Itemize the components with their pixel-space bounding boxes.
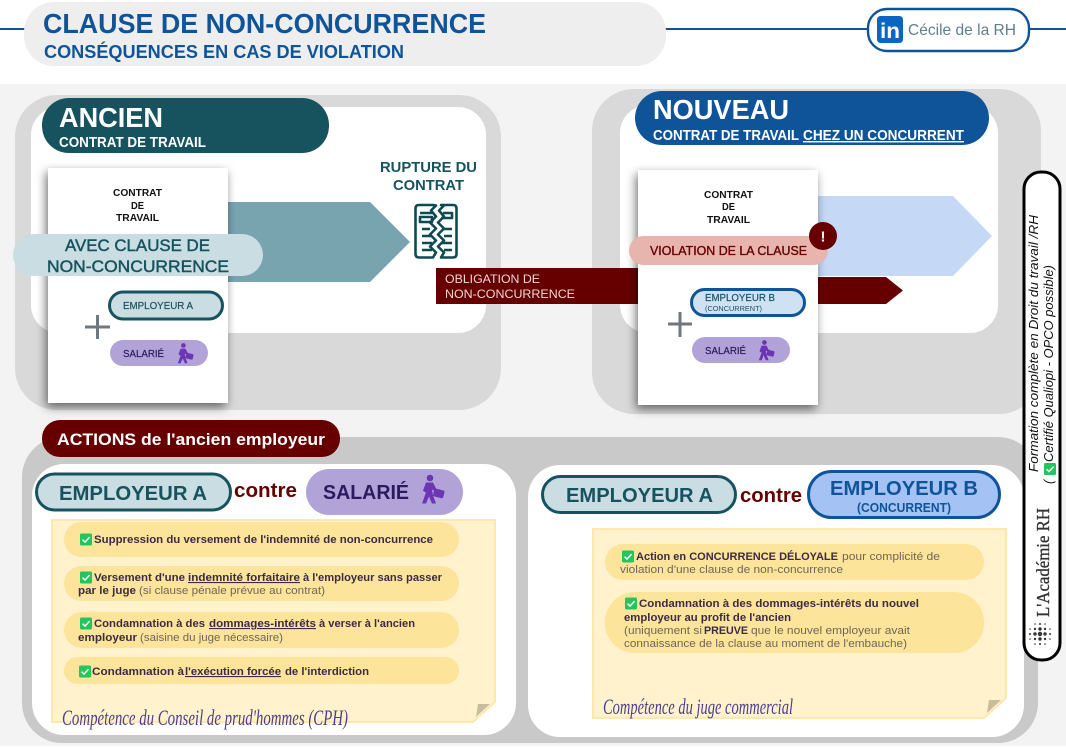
badge: employeur a: EMPLOYEUR A [59, 483, 207, 505]
item: indemnite forfaitaire: par le juge [78, 585, 136, 597]
icon: check [1044, 463, 1056, 475]
sidebar: formation [1024, 172, 1060, 660]
linkedin badge: in [880, 20, 900, 43]
item: concurrence deloyale [605, 544, 984, 580]
sidebar: formation: L'Académie RH [1033, 508, 1053, 617]
badge: salarie: SALARIÉ [123, 347, 164, 360]
sidebar: formation: ( [1042, 478, 1056, 484]
badge: employeur a: EMPLOYEUR A [566, 485, 713, 507]
heading: nouveau: NOUVEAU [653, 94, 789, 125]
item: dommages-interets: dommages-intérêts [209, 618, 316, 630]
sidebar: formation: Certifié Qualiopi - OPCO possible) [1042, 265, 1056, 462]
heading: ancien: CONTRAT DE TRAVAIL [59, 135, 206, 151]
item: dommages-interets: (saisine du juge nécessaire) [140, 632, 283, 644]
item: dommages-interets: Condamnation à des [94, 618, 205, 630]
item: suppression [64, 522, 459, 557]
badge: salarie [306, 469, 463, 515]
badge: employeur b: (CONCURRENT) [857, 501, 951, 515]
heading: nouveau: CHEZ UN CONCURRENT [803, 128, 964, 144]
card: contrat de travail [638, 170, 818, 405]
label: violation de la clause [629, 236, 828, 265]
arrow: obligation de non-concurrence: OBLIGATION DE [445, 272, 540, 286]
badge: employeur b: EMPLOYEUR B [830, 478, 978, 500]
rupture label: CONTRAT [393, 177, 464, 194]
item: dommages-interets: employeur au profit de l'ancien [624, 612, 791, 624]
badge: salarie: SALARIÉ [705, 344, 746, 357]
subpanel: employeur a contre employeur b [528, 465, 1024, 737]
title block [24, 2, 666, 66]
contre: contre [234, 480, 297, 502]
item: indemnite forfaitaire: à l'employeur sans passer [303, 572, 443, 584]
badge: employeur b [692, 290, 804, 316]
badge: salarie: SALARIÉ [323, 481, 409, 504]
label: avec clause: AVEC CLAUSE DE [65, 236, 210, 255]
heading: nouveau [635, 91, 989, 145]
icon: alert [809, 222, 837, 250]
label: avec clause [13, 234, 263, 276]
rupture label [380, 159, 477, 194]
heading: ancien: ANCIEN [59, 102, 163, 133]
heading: ancien [42, 98, 329, 153]
label: violation de la clause: VIOLATION DE LA CLAUSE [650, 244, 807, 258]
item: dommages-interets: (uniquement si [624, 625, 702, 637]
heading: actions [42, 420, 340, 457]
linkedin badge [868, 9, 1029, 51]
icon: torn contract [416, 205, 456, 258]
heading: nouveau: CONTRAT DE TRAVAIL [653, 128, 799, 144]
item: suppression: Suppression du versement de l'indemnité de non-concurrence [94, 534, 433, 546]
item: indemnite forfaitaire: indemnité forfaitaire [188, 572, 300, 584]
card: contrat de travail: CONTRAT [113, 188, 162, 199]
rupture label: RUPTURE DU [380, 159, 477, 176]
item: concurrence deloyale: Action en CONCURRENCE DÉLOYALE [636, 550, 838, 563]
card: contrat de travail: TRAVAIL [707, 215, 750, 226]
badge: employeur a [542, 476, 736, 512]
panel: ancien contrat [13, 95, 501, 410]
card: contrat de travail: TRAVAIL [116, 213, 159, 224]
badge: employeur b [808, 472, 1000, 518]
card: contrat de travail: CONTRAT [704, 190, 753, 201]
title block: CLAUSE DE NON-CONCURRENCE [43, 8, 486, 39]
note: sanctions concurrent [593, 529, 1006, 719]
sidebar: formation: Formation complète en Droit du travail /RH [1027, 214, 1041, 472]
badge: employeur a [110, 292, 222, 319]
item: dommages-interets: Condamnation à des dommages-intérêts du nouvel [639, 598, 919, 610]
arrow: obligation de non-concurrence [436, 268, 903, 304]
item: execution forcee: Condamnation à [92, 666, 185, 678]
item: dommages-interets [605, 592, 984, 653]
item: execution forcee: de l'interdiction [285, 666, 369, 678]
item: concurrence deloyale: violation d'une clause de non-concurrence [620, 564, 843, 576]
linkedin badge: Cécile de la RH [908, 22, 1016, 39]
badge: employeur a [36, 474, 230, 510]
item: indemnite forfaitaire: Versement d'une [94, 572, 185, 584]
item: indemnite forfaitaire: (si clause pénale prévue au contrat) [139, 585, 325, 597]
badge: salarie [110, 340, 208, 366]
item: dommages-interets: connaissance de la clause au moment de l'embauche) [624, 638, 907, 650]
item: dommages-interets: employeur [78, 632, 138, 644]
icon: alert: ! [820, 228, 826, 246]
label: avec clause: NON-CONCURRENCE [47, 257, 229, 276]
heading: actions: ACTIONS de l'ancien employeur [57, 430, 325, 449]
badge: employeur b: EMPLOYEUR B [705, 292, 775, 304]
contre: contre [740, 485, 802, 507]
badge: employeur a: EMPLOYEUR A [123, 300, 193, 312]
item: indemnite forfaitaire [64, 566, 459, 601]
note: sanctions salarie [52, 520, 495, 730]
card: contrat de travail: DE [722, 202, 735, 213]
item: execution forcee: l'exécution forcée [185, 666, 281, 678]
panel: nouveau background [592, 89, 1041, 414]
panel: actions [22, 420, 1038, 743]
item: dommages-interets: que le nouvel employeur avait [751, 625, 910, 637]
icon: plus [85, 315, 110, 339]
card: contrat de travail [48, 168, 228, 403]
subpanel: employeur a contre salarie [32, 464, 516, 735]
item: concurrence deloyale: pour complicité de [842, 551, 940, 563]
icon: academie logo [1029, 623, 1051, 645]
item: dommages-interets: PREUVE [704, 625, 748, 637]
item: dommages-interets [64, 612, 459, 648]
item: execution forcee [64, 657, 459, 684]
arrow: new contract [815, 196, 992, 276]
panel: nouveau contrat [629, 91, 992, 405]
item: dommages-interets: à verser à l'ancien [319, 618, 415, 630]
icon: plus [668, 312, 692, 337]
badge: employeur b: (CONCURRENT) [705, 306, 762, 313]
competence cph: Compétence du Conseil de prud'hommes (CPH) [62, 705, 348, 730]
title block: CONSÉQUENCES EN CAS DE VIOLATION [44, 41, 404, 62]
badge: salarie [692, 337, 790, 363]
competence juge commercial: Compétence du juge commercial [603, 694, 793, 719]
arrow: obligation de non-concurrence: NON-CONCURRENCE [445, 287, 575, 301]
header connector line [0, 28, 1066, 30]
card: contrat de travail: DE [131, 201, 144, 212]
arrow: contract to rupture [225, 202, 410, 282]
